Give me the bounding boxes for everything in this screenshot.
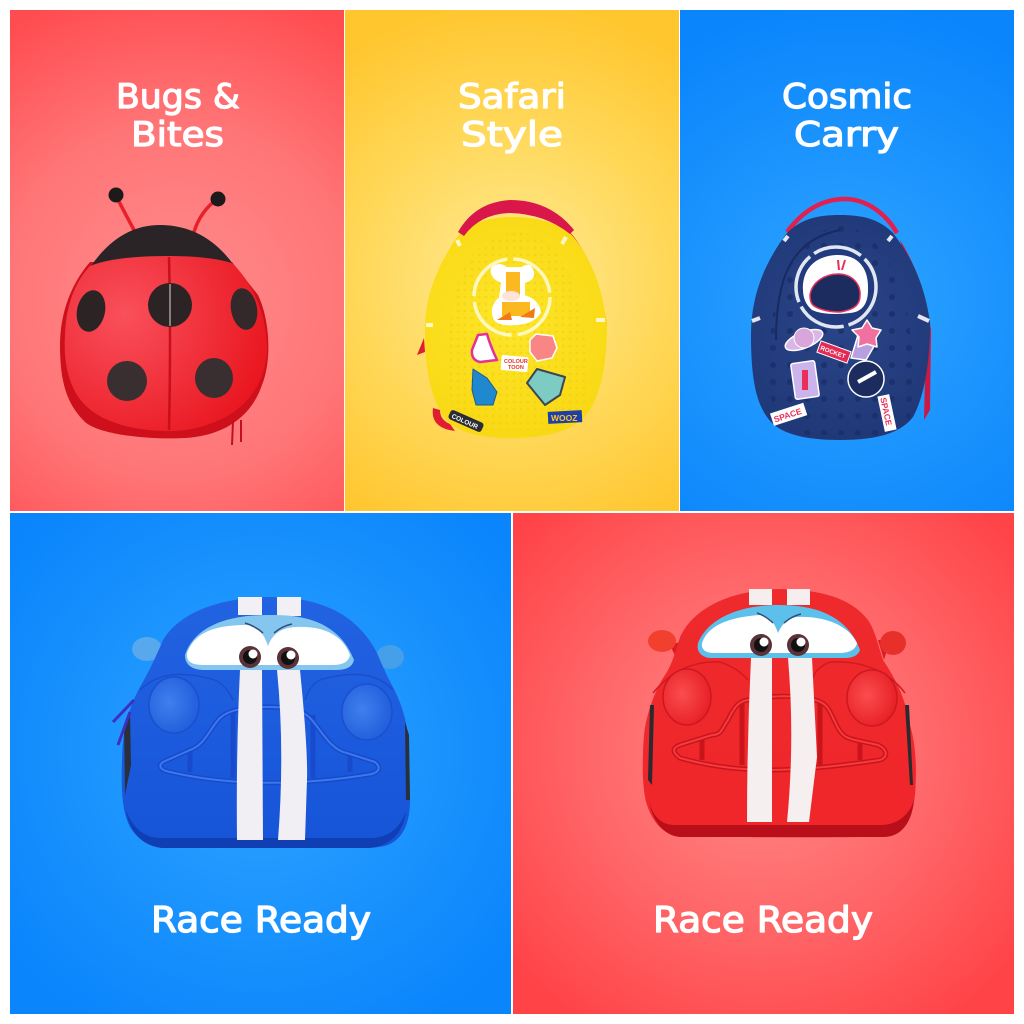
sticker: Colour Toon: COLOUR	[504, 359, 528, 365]
icon: yellow giraffe backpack	[417, 200, 607, 438]
panel: Safari Style	[345, 10, 679, 511]
heading: Bugs & Bites	[116, 77, 240, 155]
sticker: star with rainbow tail	[851, 320, 881, 360]
sticker: Colour Toon	[500, 355, 529, 372]
panel: Cosmic Carry	[680, 10, 1014, 511]
panel: Race Ready red	[513, 513, 1014, 1014]
sticker: hedgehog	[472, 369, 497, 405]
sticker: rocket card	[791, 361, 819, 399]
icon: red car backpack	[643, 589, 916, 837]
sticker: giraffe	[492, 265, 540, 324]
icon: navy astronaut backpack	[751, 199, 931, 440]
icon: blue car backpack	[113, 597, 410, 848]
label: Colour	[448, 409, 484, 433]
sticker: Colour Toon: TOON	[508, 365, 524, 371]
panel: Bugs & Bites	[10, 10, 344, 511]
label: Wooz: WOOZ	[551, 413, 577, 423]
icon: ladybug backpack	[60, 188, 268, 445]
label: Colour: COLOUR	[450, 413, 479, 431]
label: Race Ready: Race Ready	[151, 900, 371, 941]
panel: Race Ready blue	[10, 513, 511, 1014]
label: Wooz	[548, 410, 582, 424]
sticker: Rocket label	[817, 341, 851, 363]
heading: Bugs & Bites: Bugs &	[116, 77, 240, 117]
sticker: elephant	[527, 369, 565, 405]
heading: Cosmic Carry: Cosmic	[782, 77, 912, 117]
sticker: Space left: SPACE	[772, 406, 803, 424]
heading: Safari Style: Style	[461, 115, 563, 155]
sticker: Space right: SPACE	[878, 396, 894, 427]
sticker: UFO	[782, 325, 826, 355]
sticker: Space right	[877, 394, 897, 432]
sticker: pig	[530, 334, 557, 361]
heading: Bugs & Bites: Bites	[131, 115, 224, 155]
sticker: Space left	[770, 403, 807, 426]
sticker: round space dog	[848, 361, 884, 397]
sticker: Rocket label: ROCKET	[819, 345, 846, 360]
heading: Cosmic Carry	[782, 77, 912, 155]
sticker: chicken	[472, 334, 497, 362]
heading: Cosmic Carry: Carry	[794, 115, 899, 155]
label: Race Ready: Race Ready	[653, 900, 873, 941]
heading: Safari Style: Safari	[458, 77, 566, 117]
heading: Safari Style	[458, 77, 566, 155]
